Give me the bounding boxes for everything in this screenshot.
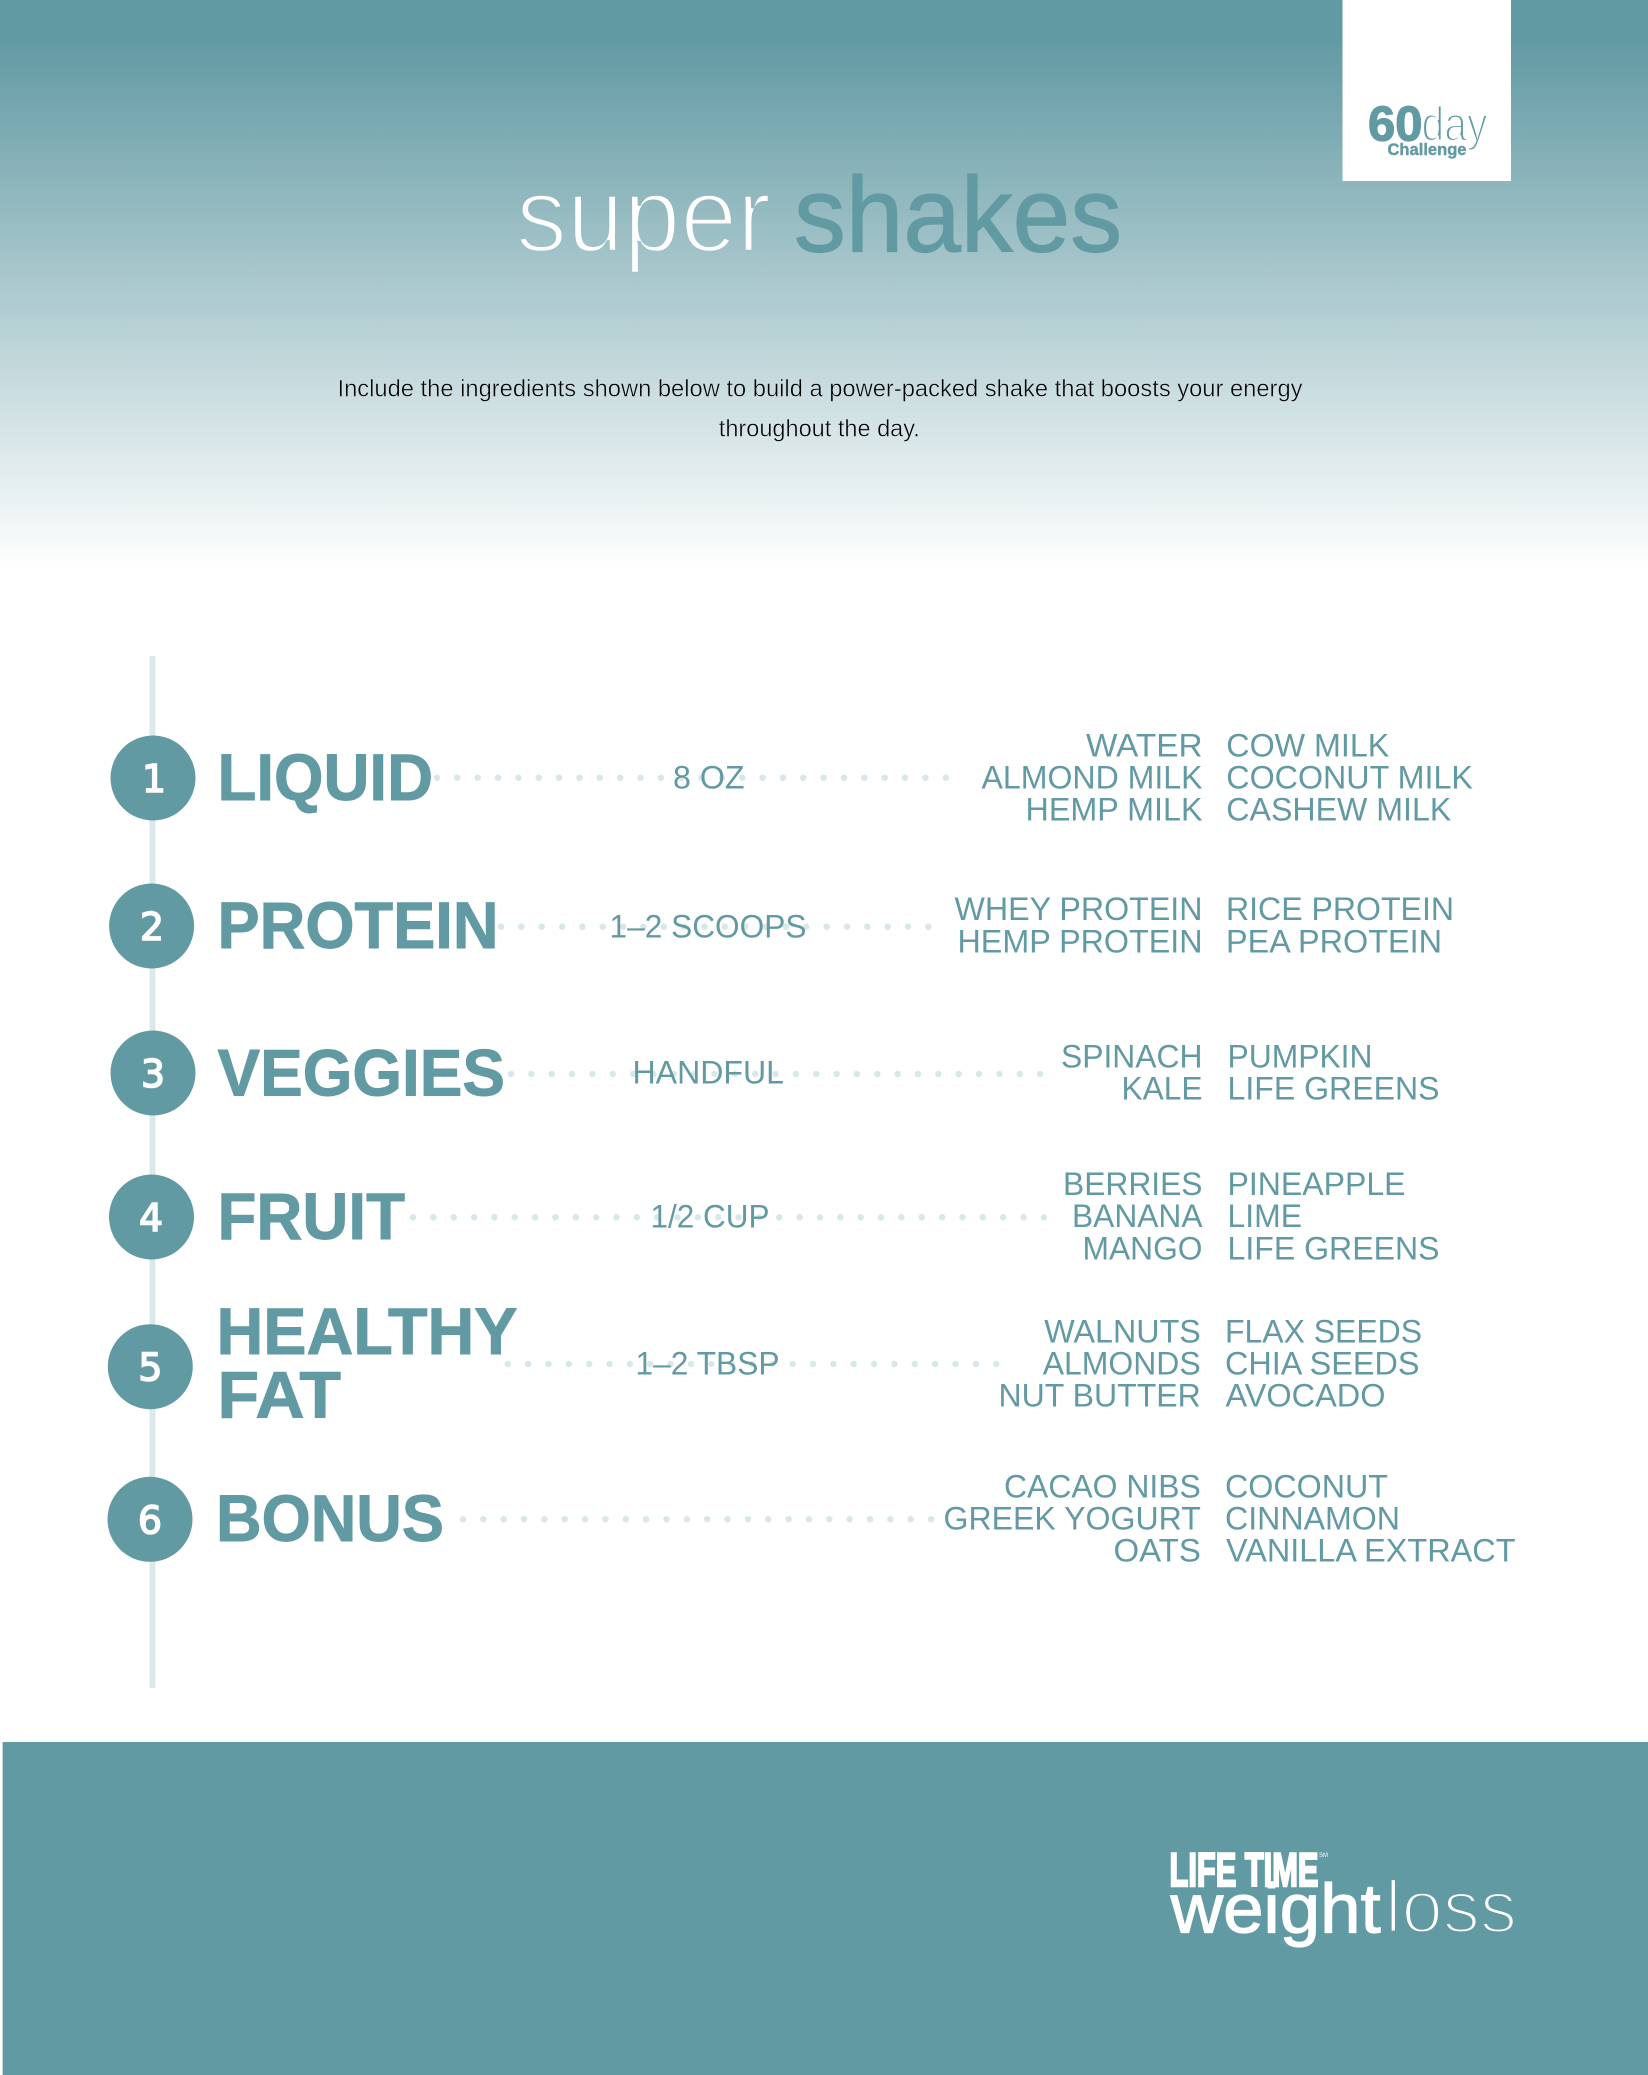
ingredients: bonus: VANILLA EXTRACT — [1226, 1532, 1516, 1568]
ingredients: veggies: SPINACH — [1061, 1039, 1202, 1075]
number badge 1 — [110, 736, 196, 820]
ingredients: protein: PEA PROTEIN — [1226, 923, 1442, 959]
title: shakes — [794, 154, 1122, 274]
row 3: veggies — [110, 1030, 1440, 1116]
number badge 6 — [108, 1477, 192, 1562]
row 4: fruit — [109, 1166, 1440, 1266]
ingredients: protein: RICE PROTEIN — [1226, 891, 1454, 927]
ingredients: protein: WHEY PROTEIN — [954, 891, 1202, 927]
intro text: throughout the day. — [719, 416, 920, 443]
logo panel: 60 day challenge — [1342, 0, 1511, 181]
dotted leader 5 — [508, 1361, 997, 1367]
title: super — [516, 154, 771, 274]
footer logo: life time weight loss: LIFE TIME — [1170, 1844, 1318, 1897]
header gradient band — [0, 0, 1648, 570]
ingredients: bonus: CINNAMON — [1225, 1501, 1400, 1537]
ingredients: liquid: ALMOND MILK — [982, 760, 1202, 796]
ingredients: healthy fat: AVOCADO — [1226, 1377, 1386, 1413]
intro text — [338, 376, 1302, 443]
heading: healthy fat: HEALTHY — [216, 1294, 518, 1368]
heading: healthy fat: FAT — [218, 1358, 341, 1432]
dotted leader 4 — [413, 1214, 1047, 1221]
amount: 1/2 cup: 1/2 CUP — [650, 1198, 770, 1234]
number badge 1: 1 — [142, 757, 166, 801]
ingredients: bonus: GREEK YOGURT — [944, 1501, 1201, 1537]
footer logo: life time weight loss — [1170, 1844, 1517, 1948]
ingredients: healthy fat: FLAX SEEDS — [1225, 1313, 1422, 1349]
ingredients: bonus — [944, 1469, 1516, 1568]
dotted leader 2 — [501, 923, 931, 930]
heading: bonus: BONUS — [216, 1481, 444, 1555]
footer logo: life time weight loss: SM — [1319, 1853, 1328, 1859]
ingredients: protein — [954, 891, 1454, 959]
ingredients: protein: HEMP PROTEIN — [958, 923, 1202, 959]
ingredients: veggies: LIFE GREENS — [1228, 1070, 1440, 1106]
ingredients: bonus: CACAO NIBS — [1004, 1469, 1201, 1505]
number badge 2 — [109, 884, 194, 968]
amount: handful: HANDFUL — [632, 1055, 784, 1091]
number badge 4 — [109, 1174, 194, 1260]
ingredients: fruit — [1063, 1166, 1440, 1266]
ingredients: liquid: WATER — [1086, 728, 1202, 764]
ingredients: fruit: PINEAPPLE — [1228, 1166, 1406, 1202]
heading: fruit: FRUIT — [218, 1179, 405, 1253]
number badge 5: 5 — [138, 1346, 162, 1390]
footer logo: life time weight loss: weight — [1170, 1869, 1381, 1947]
row 6: bonus — [108, 1469, 1516, 1568]
heading: healthy fat — [216, 1294, 518, 1432]
ingredients: healthy fat — [998, 1313, 1422, 1413]
logo panel: 60 day challenge: Challenge — [1388, 140, 1466, 159]
ingredients: liquid — [982, 728, 1473, 827]
intro text: Include the ingredients shown below to build a power-packed shake that boosts your energy — [338, 376, 1302, 403]
footer band — [3, 1742, 1648, 2075]
timeline vertical line — [150, 656, 156, 1688]
ingredients: liquid: COCONUT MILK — [1226, 760, 1473, 796]
footer logo: life time weight loss: loss — [1385, 1865, 1517, 1948]
number badge 3: 3 — [141, 1052, 165, 1096]
ingredients: fruit: BANANA — [1072, 1198, 1203, 1234]
ingredients: fruit: MANGO — [1082, 1230, 1202, 1266]
ingredients: healthy fat: WALNUTS — [1044, 1313, 1201, 1349]
number badge 3 — [110, 1030, 196, 1116]
ingredients: bonus: OATS — [1114, 1532, 1201, 1568]
logo panel: 60 day challenge: day — [1422, 99, 1488, 152]
dotted leader 6 — [463, 1516, 935, 1523]
row 2: protein — [109, 884, 1454, 968]
ingredients: liquid: HEMP MILK — [1026, 791, 1202, 827]
number badge 5 — [108, 1324, 193, 1409]
amount: 1-2 scoops: 1–2 SCOOPS — [610, 908, 806, 944]
ingredients: fruit: BERRIES — [1063, 1166, 1202, 1202]
ingredients: healthy fat: ALMONDS — [1043, 1345, 1201, 1381]
ingredients: bonus: COCONUT — [1225, 1469, 1388, 1505]
heading: protein: PROTEIN — [218, 888, 498, 962]
ingredients: veggies — [1061, 1039, 1440, 1106]
ingredients: veggies: PUMPKIN — [1228, 1039, 1372, 1075]
dotted leader 1 — [437, 774, 950, 781]
logo panel: 60 day challenge: 60 — [1368, 98, 1422, 152]
ingredients: veggies: KALE — [1122, 1070, 1202, 1106]
ingredients: liquid: COW MILK — [1226, 728, 1389, 764]
number badge 4: 4 — [139, 1196, 163, 1240]
ingredients: liquid: CASHEW MILK — [1226, 791, 1451, 827]
ingredients: healthy fat: NUT BUTTER — [998, 1377, 1201, 1413]
ingredients: healthy fat: CHIA SEEDS — [1225, 1345, 1420, 1381]
ingredients: fruit: LIME — [1228, 1198, 1302, 1234]
heading: veggies: VEGGIES — [218, 1036, 505, 1110]
dotted leader 3 — [511, 1071, 1044, 1077]
amount: 1-2 tbsp: 1–2 TBSP — [636, 1345, 780, 1381]
row 5: healthy fat — [108, 1294, 1422, 1432]
heading: liquid: LIQUID — [218, 740, 433, 814]
amount: 8 oz: 8 OZ — [673, 760, 744, 796]
title — [516, 154, 1122, 274]
number badge 6: 6 — [138, 1498, 162, 1542]
ingredients: fruit: LIFE GREENS — [1228, 1230, 1440, 1266]
number badge 2: 2 — [140, 905, 164, 949]
row 1: liquid — [110, 728, 1473, 827]
